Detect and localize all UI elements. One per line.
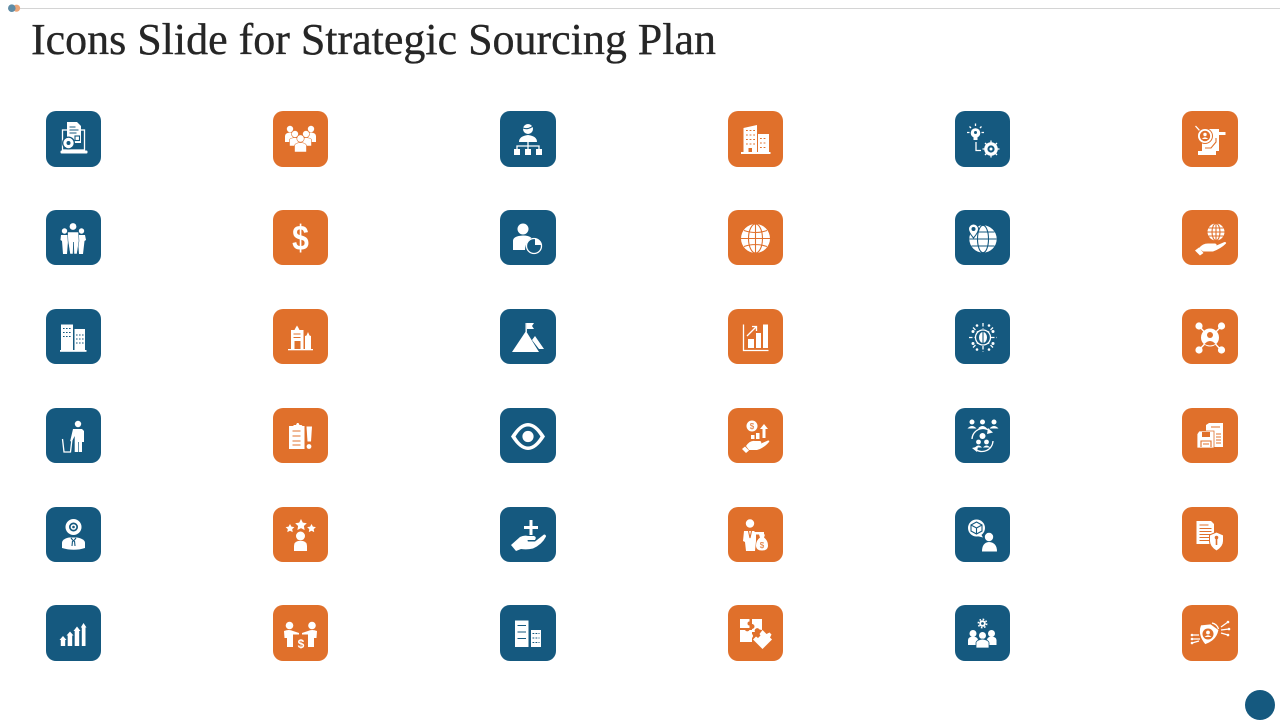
icon tile: growth chart bbox=[728, 309, 783, 364]
icon tile: hand with plus bbox=[500, 507, 556, 562]
icon tile: talent analysis machine bbox=[1182, 111, 1238, 167]
icon tile: two people exchanging dollar: $ bbox=[298, 637, 305, 651]
icon tile: person with pie chart bbox=[500, 210, 556, 265]
icon tile: hand holding globe bbox=[1182, 210, 1238, 265]
icon tile: person with money bag: $ bbox=[760, 541, 765, 550]
icon tile: documents and save disk bbox=[1182, 408, 1238, 463]
icon tile: team with gear bbox=[955, 605, 1010, 661]
icon tile: document with security shield bbox=[1182, 507, 1238, 562]
page number circle bbox=[1245, 690, 1275, 720]
icon tile: puzzle pieces bbox=[728, 605, 783, 661]
icon tile: three people bbox=[46, 210, 101, 265]
icon tile: clipboard alert bbox=[273, 408, 328, 463]
icon tile: globe with location pin bbox=[955, 210, 1010, 265]
icon tile: small city building bbox=[273, 309, 328, 364]
icon tile: idea bulb and gear bbox=[955, 111, 1010, 167]
icon tile: dollar sign bbox=[273, 210, 328, 265]
icon tile: circuit sun bbox=[955, 309, 1010, 364]
icon tile: person with money bag bbox=[728, 507, 783, 562]
icon tile: shield person with data lines bbox=[1182, 605, 1238, 661]
icon tile: document on laptop with gear bbox=[46, 111, 101, 167]
icon tile: connected network person bbox=[1182, 309, 1238, 364]
title: Icons Slide for Strategic Sourcing Plan bbox=[31, 15, 716, 64]
icon tile: person with three stars bbox=[273, 507, 328, 562]
icon tile: coin and growth on hand bbox=[728, 408, 783, 463]
icon tile: tall building pair bbox=[500, 605, 556, 661]
icon tile: people rotation bbox=[955, 408, 1010, 463]
icon tile: person at bin bbox=[46, 408, 101, 463]
icon tile: office buildings bbox=[728, 111, 783, 167]
icon tile: team group bbox=[273, 111, 328, 167]
icon tile: eye bbox=[500, 408, 556, 463]
header accent dots bbox=[8, 4, 20, 12]
icon tile: coin and growth on hand: $ bbox=[750, 422, 755, 431]
icon tile: two people exchanging dollar bbox=[273, 605, 328, 661]
icon tile: globe bbox=[728, 210, 783, 265]
icon tile: package speech bubble and person bbox=[955, 507, 1010, 562]
icon tile: head with gear in suit bbox=[46, 507, 101, 562]
icon tile: rising arrow bars bbox=[46, 605, 101, 661]
icon tile: dollar sign: $ bbox=[292, 218, 309, 258]
icon tile: tower buildings bbox=[46, 309, 101, 364]
icon tile: manager hierarchy bbox=[500, 111, 556, 167]
icon tile: mountain with flag bbox=[500, 309, 556, 364]
